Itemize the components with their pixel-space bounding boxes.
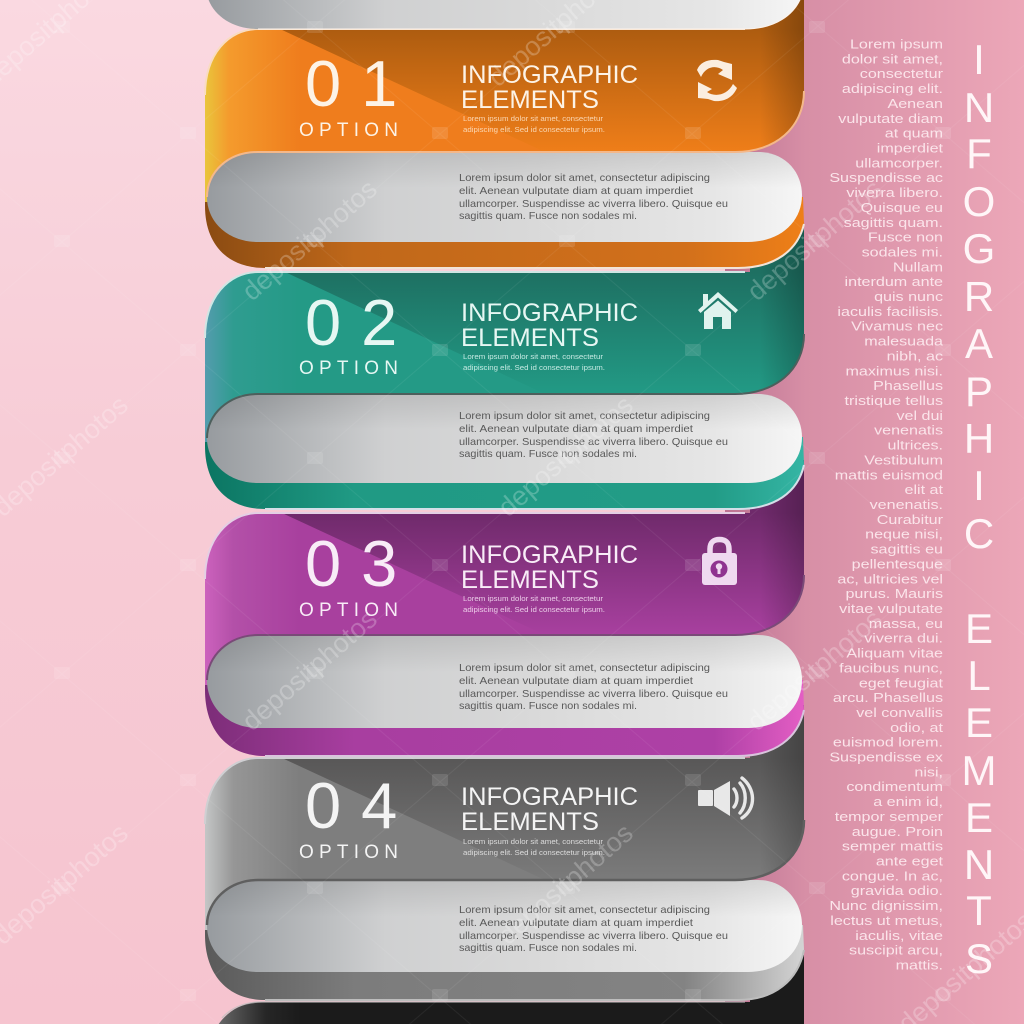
text block: right column paragraph: Curabitur [877,513,943,527]
text block: right column paragraph: Vivamus nec [851,320,943,334]
text block: right column paragraph: quis nunc [874,290,943,305]
body text 03: Lorem ipsum dolor sit amet, consectetur adipiscing [459,662,710,674]
title: vertical INFOGRAPHIC ELEMENTS: C [964,510,994,557]
icon: speaker [698,778,753,818]
body text 01: elit. Aenean vulputate diam at quam imperdiet [459,185,693,197]
panel 03 white pill [207,635,802,728]
text block: right column paragraph: ullamcorper. [855,157,943,171]
title: vertical INFOGRAPHIC ELEMENTS: N [964,841,994,888]
text block: right column paragraph: Nunc dignissim, [829,899,943,914]
body text 01: ullamcorper. Suspendisse ac viverra libero. Quisque eu [459,198,728,210]
heading 04 [461,783,638,836]
text block: right column paragraph: tempor semper [835,810,943,824]
panel: top white pill [207,0,802,29]
title: vertical INFOGRAPHIC ELEMENTS: P [965,368,993,415]
small text 03 [463,594,605,614]
small text 01 [463,114,605,134]
heading 03: ELEMENTS [461,566,599,594]
ribbon 04 lower band [205,925,804,1000]
text block: right column paragraph: at quam [885,127,943,141]
option label 04: OPTION [299,842,398,863]
text block: right column paragraph: mattis. [896,959,943,973]
text block: right column paragraph: Suspendisse ex [829,751,944,765]
text block: right column paragraph: massa, eu [869,617,943,631]
title: vertical INFOGRAPHIC ELEMENTS: F [966,130,992,177]
heading 04: ELEMENTS [461,808,599,836]
text block: right column paragraph: Phasellus [873,380,943,394]
panel: option 03 purple [205,460,804,756]
body text 02 [459,410,728,460]
text block: right column paragraph: imperdiet [877,142,943,156]
heading 03 [461,541,638,594]
title: vertical INFOGRAPHIC ELEMENTS: E [965,794,993,841]
text block: right column paragraph: vel convallis [856,706,943,721]
small text 02: adipiscing elit. Sed id consectetur ipsum. [463,363,605,372]
title: vertical INFOGRAPHIC ELEMENTS: T [966,887,992,934]
ribbon 02 light fold [205,272,545,445]
text block: right column paragraph: Aenean [887,97,943,111]
text block: right column paragraph: condimentum [846,781,943,795]
body text 03: elit. Aenean vulputate diam at quam imperdiet [459,675,693,687]
text block: right column paragraph: vitae vulputate [839,602,943,617]
small text 04: adipiscing elit. Sed id consectetur ipsum. [463,848,605,857]
text block: right column paragraph: ac, ultricies vel [837,573,943,587]
panel: option 01 orange [205,0,804,268]
small text 04 [463,837,605,857]
number 02: 02 [305,286,417,359]
title: vertical INFOGRAPHIC ELEMENTS: L [967,652,991,699]
small text 01: Lorem ipsum dolor sit amet, consectetur [463,114,604,123]
title: vertical INFOGRAPHIC ELEMENTS: S [965,935,993,982]
text block: right column paragraph: a enim id, [873,795,943,810]
text block: right column paragraph: odio, at [890,721,943,735]
heading 02: ELEMENTS [461,324,599,352]
panel 02 white pill [207,394,802,483]
stock watermark overlay: depositphotos [492,818,639,951]
text block: right column paragraph: euismod lorem. [833,736,943,750]
text block: right column paragraph: mattis euismod [835,469,943,483]
small text 03: adipiscing elit. Sed id consectetur ipsum. [463,605,605,614]
text block: right column paragraph: venenatis [874,424,943,438]
text block: right column paragraph: sagittis eu [870,543,943,557]
body text 03 [459,662,728,712]
ribbon 01 lower band [205,197,804,268]
title: vertical INFOGRAPHIC ELEMENTS: G [963,225,995,272]
body text 04: sagittis quam. Fusce non sodales mi. [459,942,637,954]
small text 02 [463,352,605,372]
panel 04 white pill [207,880,802,972]
small text 02: Lorem ipsum dolor sit amet, consectetur [463,352,604,361]
heading 04: INFOGRAPHIC [461,783,638,811]
body text 02: Lorem ipsum dolor sit amet, consectetur adipiscing [459,410,710,422]
body text 04 [459,904,728,954]
text block: right column paragraph: elit at [905,483,943,498]
text block: right column paragraph: augue. Proin [852,825,943,839]
text block: right column paragraph: faucibus nunc, [839,662,943,676]
heading 02 [461,299,638,352]
text block: right column paragraph: sodales mi. [862,246,943,260]
text block: right column paragraph: neque nisi, [865,528,943,542]
text block: right column paragraph: iaculis facilisis. [837,305,943,319]
title: vertical INFOGRAPHIC ELEMENTS: I [973,36,985,83]
text block: right column paragraph [829,38,944,973]
text block: right column paragraph: eget feugiat [859,677,943,691]
body text 02: elit. Aenean vulputate diam at quam imperdiet [459,423,693,435]
panel: right pink strip [725,0,1024,1024]
title: vertical INFOGRAPHIC ELEMENTS: I [973,462,985,509]
text block: right column paragraph: congue. In ac, [842,870,943,884]
text block: right column paragraph: viverra libero. [846,186,943,201]
ribbon 04 upper band [205,705,804,932]
title: vertical INFOGRAPHIC ELEMENTS: E [965,605,993,652]
number 01: 01 [305,47,417,120]
option label 02: OPTION [299,358,398,379]
ribbon 01 upper band [205,0,804,205]
stock watermark overlay: depositphotos [236,174,383,307]
icon: padlock [702,540,737,585]
title: vertical INFOGRAPHIC ELEMENTS: R [964,273,994,320]
heading 03: INFOGRAPHIC [461,541,638,569]
text block: right column paragraph: Fusce non [868,231,943,245]
text block: right column paragraph: suscipit arcu, [849,944,943,958]
text block: right column paragraph: nisi, [914,766,943,780]
text block: right column paragraph: maximus nisi. [845,365,943,379]
text block: right column paragraph: purus. Mauris [845,587,943,602]
small text 04: Lorem ipsum dolor sit amet, consectetur [463,837,604,846]
ribbon 03 lower band [205,680,804,756]
text block: right column paragraph: consectetur [860,68,943,82]
ribbon 01 light fold [205,29,545,205]
option label 01: OPTION [299,120,398,141]
small text 03: Lorem ipsum dolor sit amet, consectetur [463,594,604,603]
body text 02: sagittis quam. Fusce non sodales mi. [459,448,637,460]
text block: right column paragraph: venenatis. [870,498,943,513]
heading 01: ELEMENTS [461,86,599,114]
stock watermark overlay: depositphotos [741,174,888,307]
body text 04: ullamcorper. Suspendisse ac viverra libero. Quisque eu [459,930,728,942]
text block: right column paragraph: lectus ut metus, [830,914,943,928]
icon: refresh arrows [697,60,737,101]
stock watermark overlay: depositphotos [741,604,888,737]
body text 01: sagittis quam. Fusce non sodales mi. [459,210,637,222]
text block: right column paragraph: ultrices. [888,439,943,453]
ribbon 03 light fold [205,513,545,687]
icon: home [698,292,738,329]
text block: right column paragraph: viverra dui. [864,632,943,646]
text block: right column paragraph: pellentesque [852,558,943,572]
heading 01: INFOGRAPHIC [461,61,638,89]
title: vertical INFOGRAPHIC ELEMENTS: O [963,178,995,225]
ribbon 02 upper band [205,222,804,445]
small text 01: adipiscing elit. Sed id consectetur ipsum. [463,125,605,134]
text block: right column paragraph: nibh, ac [887,350,943,364]
body text 04: elit. Aenean vulputate diam at quam imperdiet [459,917,693,929]
text block: right column paragraph: vulputate diam [838,112,943,126]
body text 02: ullamcorper. Suspendisse ac viverra libero. Quisque eu [459,436,728,448]
title: vertical INFOGRAPHIC ELEMENTS: A [965,320,993,367]
text block: right column paragraph: arcu. Phasellus [833,691,943,706]
text block: right column paragraph: Quisque eu [861,201,943,215]
title: vertical INFOGRAPHIC ELEMENTS: H [964,415,994,462]
title: vertical INFOGRAPHIC ELEMENTS: N [964,84,994,131]
title: vertical INFOGRAPHIC ELEMENTS: M [962,747,996,794]
text block: right column paragraph: sagittis quam. [844,216,943,230]
text block: right column paragraph: Lorem ipsum [850,38,943,52]
text block: right column paragraph: tristique tellus [845,394,943,409]
body text 03: ullamcorper. Suspendisse ac viverra libero. Quisque eu [459,688,728,700]
text block: right column paragraph: Suspendisse ac [829,172,943,186]
heading 01 [461,61,638,114]
number 04: 04 [305,769,417,842]
stock watermark overlay: depositphotos [236,604,383,737]
stock watermark overlay: depositphotos [492,390,639,523]
text block: right column paragraph: dolor sit amet, [842,53,943,67]
panel: option 04 gray [205,705,804,1000]
text block: right column paragraph: adipiscing elit. [842,82,943,97]
body text 04: Lorem ipsum dolor sit amet, consectetur adipiscing [459,904,710,916]
text block: right column paragraph: gravida odio. [851,885,943,899]
body text 03: sagittis quam. Fusce non sodales mi. [459,700,637,712]
text block: right column paragraph: vel dui [896,409,943,423]
heading 02: INFOGRAPHIC [461,299,638,327]
text block: right column paragraph: ante eget [876,855,943,869]
ribbon 03 upper band [205,460,804,687]
number 03: 03 [305,527,417,600]
band: bottom black option [213,955,804,1024]
body text 01: Lorem ipsum dolor sit amet, consectetur adipiscing [459,172,710,184]
text block: right column paragraph: semper mattis [842,840,943,854]
panel 01 white pill [207,152,802,242]
panel: option 02 teal [205,222,804,509]
text block: right column paragraph: Vestibulum [864,454,943,468]
text block: right column paragraph: iaculis, vitae [855,929,943,943]
text block: right column paragraph: Aliquam vitae [846,647,943,661]
text block: right column paragraph: Nullam [893,261,943,275]
text block: right column paragraph: malesuada [864,335,944,349]
text block: right column paragraph: interdum ante [845,276,943,290]
option label 03: OPTION [299,600,398,621]
ribbon 02 lower band [205,437,804,509]
body text 01 [459,172,728,222]
ribbon 04 light fold [205,758,545,932]
title: vertical INFOGRAPHIC ELEMENTS: E [965,699,993,746]
title: vertical INFOGRAPHIC ELEMENTS [962,36,996,982]
